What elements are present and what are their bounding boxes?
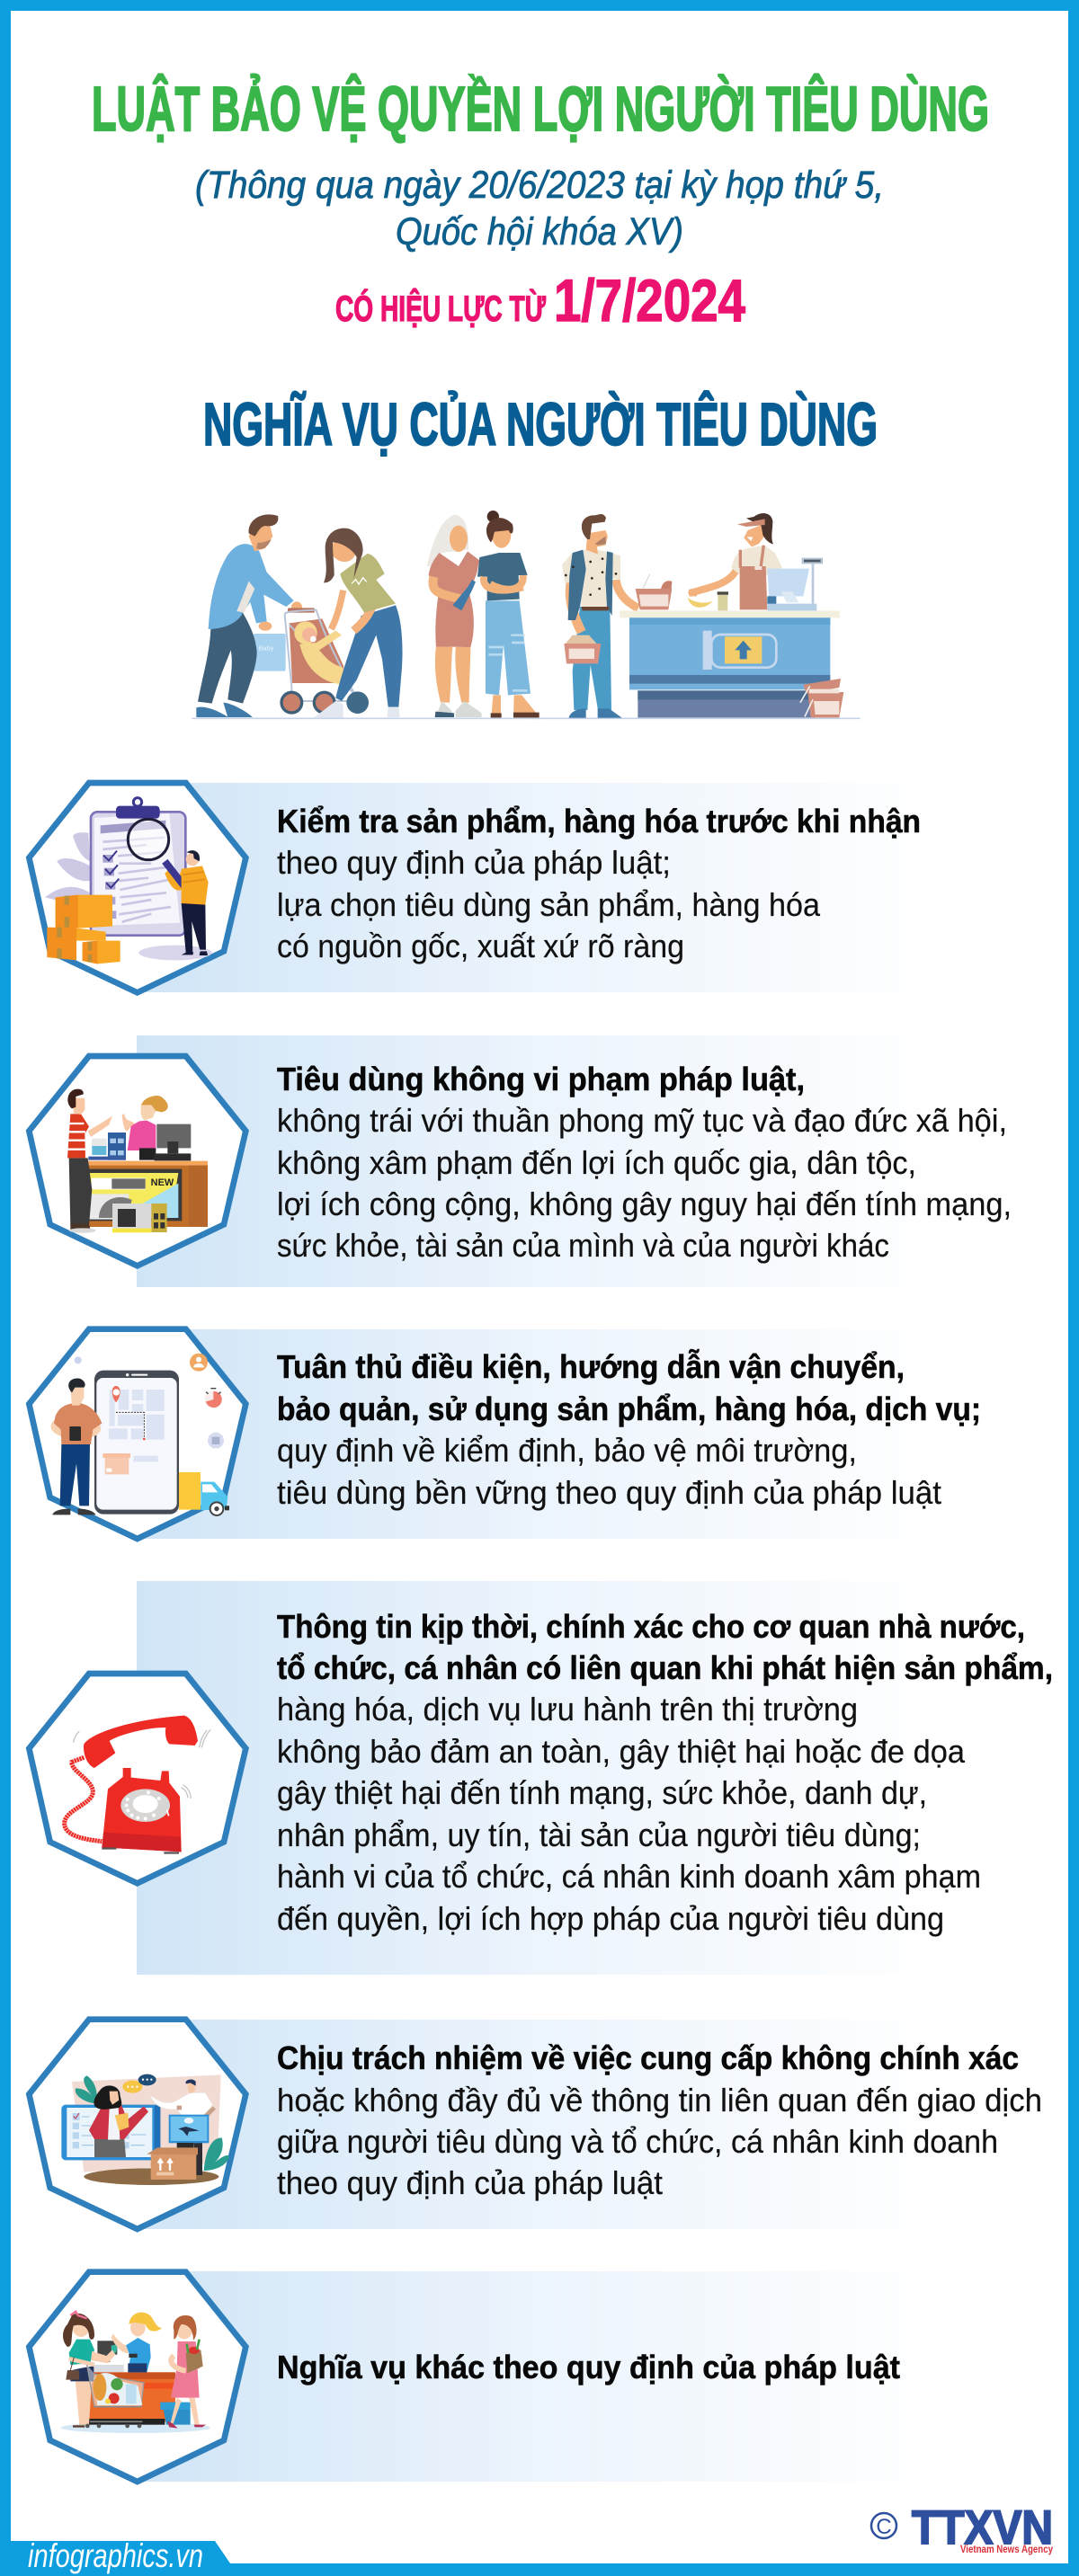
footer tab: website: infographics.vn — [28, 2537, 203, 2574]
text block 4: đến quyền, lợi ích hợp pháp của người tiêu dùng — [277, 1900, 944, 1937]
figures: family with stroller and two women: Baby — [259, 644, 274, 652]
text block 1: lựa chọn tiêu dùng sản phẩm, hàng hóa — [277, 886, 821, 923]
text block 2: không trái với thuần phong mỹ tục và đạo đức xã hội, — [277, 1102, 1007, 1139]
icon: phone delivery tracking — [29, 1329, 245, 1539]
panel 4: timely information — [29, 1581, 1053, 1975]
text block 3: tiêu dùng bền vững theo quy định của pháp luật — [277, 1474, 941, 1511]
panel 1: check products — [29, 783, 944, 992]
text block 3 — [277, 1348, 981, 1511]
effective date: 1/7/2024 — [554, 267, 745, 333]
illustration: shoppers in line at checkout — [192, 511, 861, 718]
icon: online transaction — [29, 2020, 245, 2229]
text block 4: nhân phẩm, uy tín, tài sản của người tiêu dùng; — [277, 1817, 921, 1853]
subtitle — [195, 164, 884, 253]
text block 5: Chịu trách nhiệm về việc cung cấp không chính xác — [277, 2039, 1019, 2076]
icon: clipboard inspection — [29, 783, 245, 992]
text block 5: giữa người tiêu dùng và tổ chức, cá nhân kinh doanh — [277, 2123, 998, 2160]
icon: electronics store counter — [29, 1056, 245, 1266]
effective date: CÓ HIỆU LỰC TỪ — [335, 288, 547, 329]
text block 1: Kiểm tra sản phẩm, hàng hóa trước khi nhận — [277, 803, 921, 839]
text block 2: sức khỏe, tài sản của mình và của người khác — [277, 1227, 889, 1264]
logo: TTXVN: C — [876, 2515, 892, 2539]
text block 2: Tiêu dùng không vi phạm pháp luật, — [277, 1061, 805, 1097]
text block 1: có nguồn gốc, xuất xứ rõ ràng — [277, 928, 684, 964]
text block 4: hàng hóa, dịch vụ lưu hành trên thị trường — [277, 1691, 858, 1728]
icon: women at supermarket checkout — [29, 2272, 245, 2482]
text block 4: gây thiệt hại đến tính mạng, sức khỏe, danh dự, — [277, 1774, 927, 1811]
text block 4: không bảo đảm an toàn, gây thiệt hại hoặc đe dọa — [277, 1733, 966, 1770]
logo: TTXVN: Vietnam News Agency — [960, 2543, 1053, 2555]
icon: red telephone — [29, 1674, 245, 1883]
figures: family with stroller and two women — [192, 511, 544, 718]
subtitle: Quốc hội khóa XV) — [396, 210, 683, 253]
text block 1 — [277, 803, 921, 964]
text block 4: Thông tin kịp thời, chính xác cho cơ quan nhà nước, — [277, 1608, 1025, 1645]
icon: electronics store counter: NEW — [151, 1177, 174, 1188]
text block 3: bảo quản, sử dụng sản phẩm, hàng hóa, dịch vụ; — [277, 1390, 981, 1427]
text block 5 — [277, 2039, 1042, 2201]
figures: customer and cashier at counter — [531, 513, 861, 718]
text block 2 — [277, 1061, 1012, 1264]
text block 2: không xâm phạm đến lợi ích quốc gia, dân tộc, — [277, 1144, 916, 1181]
panel 2: lawful consumption — [29, 1035, 1012, 1287]
panel 3: transport and storage — [29, 1329, 981, 1539]
effective date — [335, 267, 745, 333]
text block 5: hoặc không đầy đủ về thông tin liên quan đến giao dịch — [277, 2082, 1042, 2119]
subtitle: (Thông qua ngày 20/6/2023 tại kỳ họp thứ 5, — [195, 164, 884, 207]
panel 5: accuracy responsibility — [29, 2020, 1042, 2229]
text block 4 — [277, 1608, 1053, 1937]
text block 6: Nghĩa vụ khác theo quy định của pháp luật — [277, 2349, 900, 2385]
panel 6: other obligations — [29, 2271, 944, 2482]
text block 2: lợi ích công cộng, không gây nguy hại đến tính mạng, — [277, 1186, 1012, 1222]
text block 4: hành vi của tổ chức, cá nhân kinh doanh xâm phạm — [277, 1858, 981, 1895]
text block 3: Tuân thủ điều kiện, hướng dẫn vận chuyển, — [277, 1348, 905, 1385]
text block 3: quy định về kiểm định, bảo vệ môi trường, — [277, 1432, 857, 1469]
text block 5: theo quy định của pháp luật — [277, 2164, 663, 2201]
logo: TTXVN: TTXVN — [912, 2501, 1053, 2554]
text block 1: theo quy định của pháp luật; — [277, 844, 671, 881]
